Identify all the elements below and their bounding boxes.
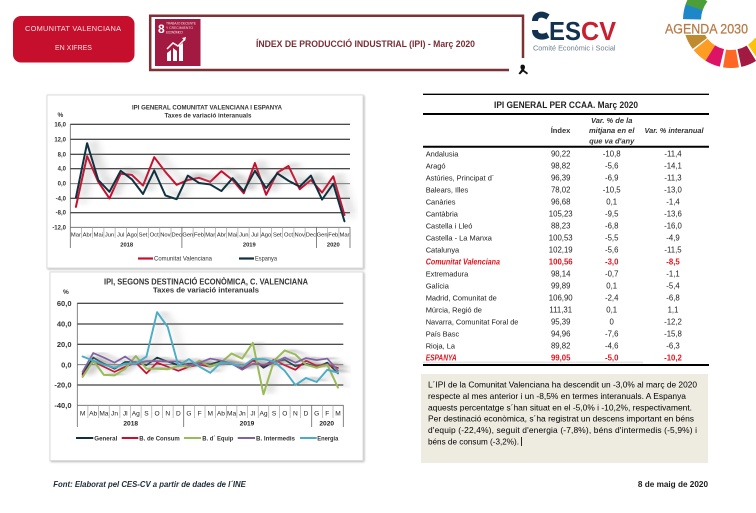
y axis labels: 40,0	[57, 320, 72, 329]
icon: SDG 8 tile: TRABAJO DECENTE	[166, 22, 197, 26]
row: Catalunya: -11,5	[664, 245, 682, 254]
row: Catalunya: Catalunya	[426, 245, 460, 254]
y axis labels	[52, 122, 67, 231]
legend	[76, 435, 339, 442]
chart title: IPI, SEGONS DESTINACIÓ ECONÒMICA, C. VALENCIANA	[104, 278, 308, 286]
heading: ÍNDEX DE PRODUCCIÓ INDUSTRIAL (IPI) - Març 2020	[256, 38, 475, 49]
y axis labels: 0,0	[61, 360, 72, 369]
row: Canàries: Canàries	[426, 197, 456, 206]
row: Canàries: -1,4	[666, 197, 680, 206]
row: Canàries	[426, 197, 680, 206]
row: Múrcia: 1,1	[668, 305, 678, 314]
y axis labels: -4,0	[56, 196, 67, 202]
text block: summary commentary	[421, 374, 708, 463]
text block: summary commentary: L´IPI de la Comunitat Valenciana ha descendit un -3,0% al març de 2020	[428, 379, 697, 389]
row: Andalusia: Andalusia	[426, 149, 459, 158]
row: Comunitat Valenciana: -3,0	[605, 257, 619, 266]
row: Aragó: -5,6	[605, 161, 618, 170]
column headers: Var. % de la	[591, 116, 632, 125]
row: Galícia	[426, 281, 680, 290]
x axis labels: O	[282, 410, 287, 418]
text block: summary commentary: respecte al mes anterior i un -8,5% en termes interanuals. A Espanya	[428, 391, 686, 401]
row: Cantàbria: -9,5	[605, 209, 619, 218]
legend: Energia	[317, 435, 339, 442]
x axis labels: Ago	[261, 232, 271, 238]
x axis labels: Jl	[123, 410, 128, 418]
x axis labels: Abr	[83, 232, 92, 238]
x axis labels: M	[80, 410, 85, 418]
x axis labels: 2019	[240, 420, 255, 428]
row: Espanya	[426, 353, 683, 362]
x axis labels: Mai	[94, 232, 103, 238]
row: Aragó: 98,82	[551, 161, 570, 170]
row: Galícia: Galícia	[426, 281, 450, 290]
icon: SDG 8 tile: 8	[158, 22, 165, 36]
row: Comunitat Valenciana: -8,5	[666, 257, 680, 266]
logo: CES CV	[533, 15, 617, 52]
x axis labels: Jun	[239, 232, 248, 238]
logo: Agenda 2030 wheel: AGENDA 2030	[665, 22, 748, 36]
row: Navarra: 0	[610, 317, 615, 326]
row: Navarra: 95,39	[551, 317, 570, 326]
row: Cantàbria: Cantàbria	[426, 209, 459, 218]
y axis labels: 12,0	[54, 137, 67, 143]
y axis labels: -40,0	[54, 401, 72, 410]
chart title	[104, 278, 308, 294]
row: Galícia: 99,89	[551, 281, 570, 290]
row: Castella - La Manxa	[426, 233, 680, 242]
legend: Espanya	[255, 256, 277, 263]
header badge: Comunitat Valenciana en xifres: COMUNITAT VALENCIANA	[25, 24, 121, 33]
line series: Espanya	[76, 143, 344, 221]
panel: general IPI line chart	[47, 95, 363, 268]
row: Astúries: 96,39	[551, 173, 570, 182]
x axis labels: Jl	[250, 410, 256, 418]
y axis labels: 4,0	[58, 167, 67, 173]
row: Navarra: -12,2	[664, 317, 682, 326]
title box	[150, 16, 523, 70]
x axis labels: Ma	[99, 410, 109, 418]
column headers	[551, 116, 704, 146]
x axis labels: Mar	[71, 232, 81, 238]
table: IPI general per CCAA	[423, 94, 709, 365]
row: Cantàbria: -13,6	[664, 209, 682, 218]
row: Astúries: -11,3	[664, 173, 682, 182]
icon: SDG 8 tile	[155, 19, 200, 66]
row: Astúries: -6,9	[605, 173, 618, 182]
chart title: IPI GENERAL COMUNITAT VALENCIANA I ESPANYA	[132, 104, 282, 112]
row: Andalusia: -11,4	[664, 149, 682, 158]
row: Andalusia: -10,8	[603, 149, 621, 158]
row: Castella - La Manxa: -5,5	[605, 233, 619, 242]
row: Comunitat Valenciana: 100,56	[549, 257, 573, 266]
row: Balears: -10,5	[603, 185, 621, 194]
row: Aragó	[426, 161, 682, 170]
logo: Agenda 2030 wheel	[664, 0, 756, 75]
y axis labels: -12,0	[52, 225, 67, 231]
row: Múrcia: 111,31	[549, 305, 572, 314]
row: Balears: 78,02	[551, 185, 570, 194]
row: Catalunya: 102,19	[549, 245, 573, 254]
line series: Bens de consum	[83, 360, 338, 375]
row: País Basc: -7,6	[605, 329, 618, 338]
y axis labels: 16,0	[54, 122, 67, 128]
row: Múrcia: 0,1	[606, 305, 617, 314]
row: Rioja: Rioja, La	[426, 341, 456, 350]
legend: B. Intermedis	[256, 435, 295, 442]
x axis labels: Dec	[306, 232, 316, 238]
row: Balears	[426, 185, 683, 194]
logo: CES CV: Comité Econòmic i Social	[533, 44, 616, 52]
x axis labels: Set	[273, 232, 282, 238]
x axis labels: D	[176, 410, 181, 418]
column headers: Índex	[551, 126, 571, 135]
line series: Bens intermedis	[83, 353, 338, 372]
chart title: Taxes de variació interanuals	[164, 112, 252, 120]
text block: summary commentary: béns de consum (-3,2%).	[428, 436, 519, 446]
x axis labels: M	[208, 410, 213, 418]
row: Astúries: Astúries, Principat d´	[426, 173, 494, 182]
panel: general IPI line chart: %	[58, 112, 64, 119]
row: Madrid: -6,8	[666, 293, 680, 302]
x axis labels: Nov	[295, 232, 305, 238]
line series: Comunitat Valenciana	[76, 156, 344, 215]
x axis labels: M	[335, 410, 341, 418]
row: País Basc: -15,8	[664, 329, 682, 338]
row: Rioja: -6,3	[666, 341, 680, 350]
x axis labels: Gen	[317, 232, 328, 238]
row: Cantàbria	[426, 209, 682, 218]
row: Extremadura: -1,1	[666, 269, 680, 278]
column headers: Var. % interanual	[644, 126, 704, 135]
row: Andalusia	[426, 149, 682, 158]
x axis labels: Gen	[182, 232, 193, 238]
row: Extremadura	[426, 269, 680, 278]
row: País Basc	[426, 329, 682, 338]
row: Galícia: 0,1	[606, 281, 617, 290]
panel: IPI by economic destination line chart	[50, 272, 363, 460]
x axis labels: Abr	[217, 232, 226, 238]
table heading: IPI GENERAL PER CCAA. Març 2020	[494, 100, 638, 110]
text block: summary commentary: d'equip (-22,4%), seguit d'energia (-7,8%), béns d'intermedis (-5,9%) i	[428, 425, 697, 435]
x axis labels: N	[165, 410, 170, 418]
row: Andalusia: 90,22	[551, 149, 570, 158]
x axis labels: Oct	[150, 232, 159, 238]
row: Castella - La Manxa: Castella - La Manxa	[426, 233, 493, 242]
source note: Font: Elaborat pel CES-CV a partir de dades de l´INE	[53, 480, 246, 489]
row: Extremadura: -0,7	[605, 269, 618, 278]
row: Madrid: Madrid, Comunitat de	[426, 293, 497, 302]
y axis labels: 60,0	[57, 299, 72, 308]
row: Múrcia: Múrcia, Regió de	[426, 305, 482, 314]
row: Aragó: Aragó	[426, 161, 446, 170]
x axis labels: O	[155, 410, 160, 418]
legend	[138, 256, 277, 263]
x axis labels: F	[198, 410, 202, 418]
chart title	[132, 104, 282, 120]
x axis labels: Ab	[89, 410, 98, 418]
x axis labels: 2020	[319, 420, 334, 428]
legend: B. de Consum	[139, 435, 180, 442]
logo: CES CV: ES	[549, 16, 581, 46]
row: Castella i Lleó: 88,23	[551, 221, 570, 230]
x axis labels: F	[325, 410, 329, 418]
x axis labels: 2019	[243, 242, 257, 248]
row: País Basc: 94,96	[551, 329, 570, 338]
x axis labels: Ag	[132, 410, 140, 418]
x axis labels: Feb	[194, 232, 204, 238]
row: Catalunya: -5,6	[605, 245, 618, 254]
x axis labels: 2018	[120, 242, 134, 248]
row: Balears: Balears, Illes	[426, 185, 469, 194]
row: Extremadura: 98,14	[551, 269, 571, 278]
text block: summary commentary: Per destinació econòmica, s´ha registrat un descens important en béns	[428, 413, 694, 423]
row: Rioja: 89,82	[551, 341, 570, 350]
x axis labels: Dec	[171, 232, 182, 238]
x axis labels: Feb	[328, 232, 338, 238]
row: Rioja	[426, 341, 680, 350]
x axis labels	[71, 232, 350, 248]
x axis labels: Mar	[340, 232, 350, 238]
header badge: Comunitat Valenciana en xifres	[13, 16, 134, 62]
column headers: que va d'any	[589, 136, 635, 146]
x axis labels: Nov	[160, 232, 171, 238]
row: Canàries: 96,68	[551, 197, 570, 206]
legend: B. d´ Equip	[202, 435, 233, 442]
row: Astúries	[426, 173, 682, 182]
legend: General	[94, 435, 118, 442]
date: 8 de maig de 2020	[638, 480, 708, 489]
x axis labels: S	[272, 410, 277, 418]
y axis labels: -8,0	[56, 211, 67, 217]
legend: Comunitat Valenciana	[154, 256, 212, 263]
row: Navarra	[426, 317, 682, 326]
row: Cantàbria: 105,23	[549, 209, 573, 218]
row: Rioja: -4,6	[605, 341, 618, 350]
row: Canàries: 0,1	[606, 197, 617, 206]
x axis labels: D	[304, 410, 309, 418]
row: Espanya: -10,2	[664, 353, 683, 362]
y axis labels: 8,0	[58, 152, 67, 158]
x axis labels: Jn	[239, 410, 246, 418]
y axis labels	[54, 299, 72, 410]
row: Aragó: -14,1	[664, 161, 682, 170]
icon: SDG 8 tile: Y CRECIMIENTO	[166, 26, 193, 30]
row: Catalunya	[426, 245, 682, 254]
x axis labels	[80, 410, 341, 428]
panel: IPI by economic destination line chart: %	[63, 289, 69, 296]
text block: summary commentary: aquests percentatge s´han situat en el -5,0% i -10,2%, respectivament.	[428, 402, 692, 412]
row: Castella - La Manxa: 100,53	[549, 233, 573, 242]
row: Castella i Lleó: -6,8	[605, 221, 618, 230]
column headers: mitjana en el	[589, 126, 635, 135]
x axis labels: Ag	[259, 410, 268, 418]
x axis labels: Ago	[127, 232, 137, 238]
row: Navarra: Navarra, Comunitat Foral de	[426, 317, 518, 326]
row: Madrid: -2,4	[605, 293, 619, 302]
line series: Energia	[83, 312, 338, 385]
x axis labels: Jun	[105, 232, 114, 238]
x axis labels: Mai	[228, 232, 237, 238]
x axis labels: Mar	[205, 232, 215, 238]
row: Espanya: -5,0	[605, 353, 619, 362]
x axis labels: G	[314, 410, 319, 418]
x axis labels: S	[144, 410, 149, 418]
x axis labels: Oct	[284, 232, 293, 238]
row: Madrid	[426, 293, 680, 302]
icon: black ribbon	[518, 65, 528, 74]
row: Castella i Lleó	[426, 221, 683, 230]
x axis labels: Ab	[217, 410, 225, 418]
x axis labels: Jul	[117, 232, 124, 238]
x axis labels: Jn	[111, 410, 118, 418]
x axis labels: 2018	[123, 420, 138, 428]
row: Espanya: 99,05	[551, 353, 571, 362]
x axis labels: Jul	[251, 232, 259, 238]
logo: CES CV: CV	[581, 16, 617, 46]
chart title: Taxes de variació interanuals	[153, 286, 259, 294]
x axis labels: Ma	[227, 410, 237, 418]
row: Madrid: 106,90	[549, 293, 573, 302]
row: Comunitat Valenciana: Comunitat Valenciana	[426, 257, 501, 266]
y axis labels: 0,0	[58, 182, 67, 188]
x axis labels: G	[186, 410, 192, 418]
row: Castella - La Manxa: -4,9	[666, 233, 680, 242]
line series: Bens d'equip	[83, 343, 338, 394]
row: Castella i Lleó: -16,0	[664, 221, 683, 230]
row: Castella i Lleó: Castella i Lleó	[426, 221, 472, 230]
row: Múrcia	[426, 305, 678, 314]
x axis labels: 2020	[327, 242, 340, 248]
x axis labels: N	[293, 410, 298, 418]
icon: SDG 8 tile: ECONÓMICO	[166, 30, 183, 34]
line series: General	[83, 358, 338, 374]
row: País Basc: País Basc	[426, 329, 459, 338]
y axis labels: 20,0	[57, 340, 72, 349]
x axis labels: Set	[139, 232, 148, 238]
row: Comunitat Valenciana	[426, 257, 680, 266]
header badge: Comunitat Valenciana en xifres: EN XIFRES	[55, 45, 92, 52]
row: Balears: -13,0	[664, 185, 683, 194]
row: Extremadura: Extremadura	[426, 269, 469, 278]
row: Espanya: ESPANYA	[426, 353, 457, 362]
y axis labels: -20,0	[54, 381, 72, 390]
row: Galícia: -5,4	[666, 281, 680, 290]
